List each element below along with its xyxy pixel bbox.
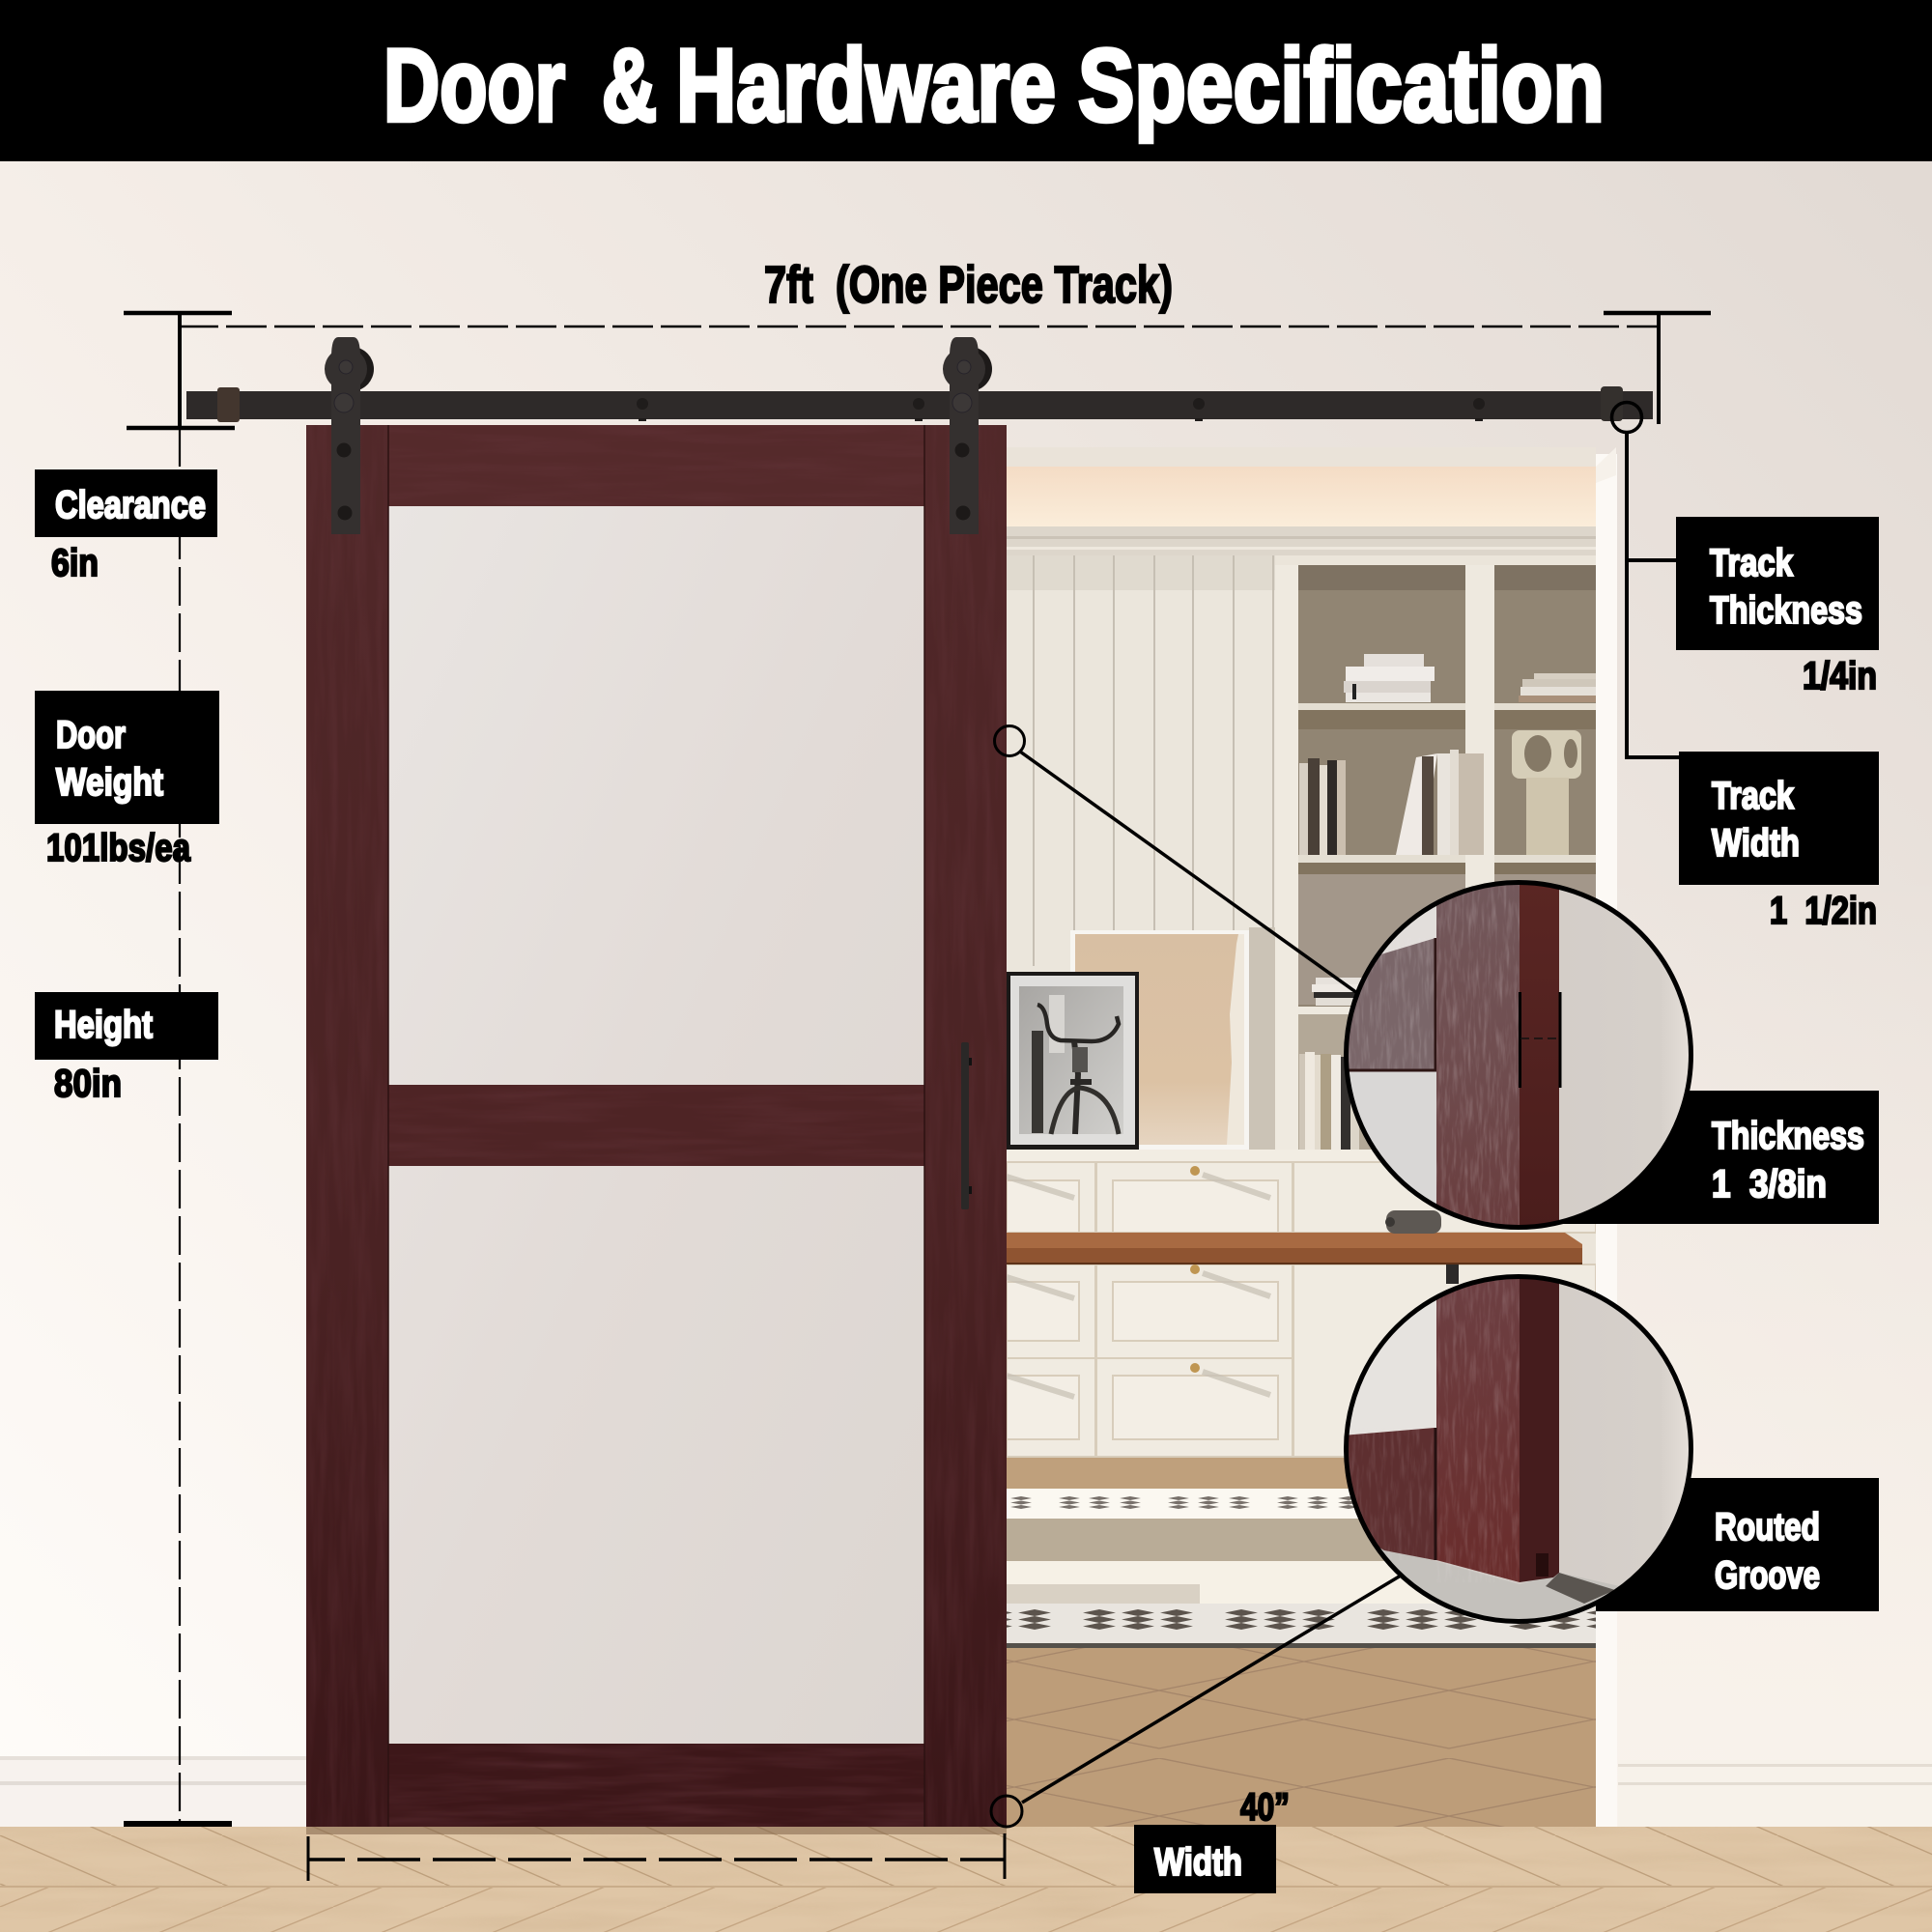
label: track width — [1679, 752, 1879, 932]
label: routed groove: Groove — [1715, 1554, 1820, 1597]
sculpture — [1512, 730, 1581, 855]
right stile — [924, 425, 1007, 1827]
header band — [0, 0, 1932, 161]
title: Door — [384, 27, 565, 143]
title — [384, 27, 1605, 143]
glass panel — [388, 506, 925, 1744]
floor — [0, 1827, 1932, 1932]
magnifier: routed groove detail — [1343, 1273, 1695, 1628]
bottom rail — [388, 1744, 924, 1827]
label: clearance: 6in — [51, 542, 99, 584]
label: track width: Track — [1712, 775, 1795, 817]
books stack right — [1519, 673, 1596, 702]
label: track width: Width — [1712, 822, 1800, 865]
track bolts — [637, 398, 1485, 421]
baseboards — [0, 1756, 1932, 1827]
door handle — [961, 1042, 972, 1209]
label: thickness: 1 3/8in — [1712, 1163, 1827, 1206]
gold knobs — [1190, 1166, 1200, 1373]
label: clearance: Clearance — [55, 484, 206, 526]
middle rail — [388, 1085, 924, 1166]
books stack — [1344, 654, 1435, 702]
groove leader line and marker — [991, 1573, 1406, 1827]
top rail — [388, 425, 924, 506]
barn door — [306, 425, 1007, 1827]
label: routed groove — [1596, 1478, 1879, 1611]
label: door weight: 101lbs/ea — [46, 827, 191, 869]
wall panelling — [1007, 555, 1275, 1159]
track length dimension line — [124, 313, 1711, 428]
right hanger — [943, 337, 992, 534]
bowl — [1385, 1210, 1441, 1234]
title: & — [602, 27, 657, 143]
rug — [1007, 1489, 1596, 1648]
label: thickness: Thickness — [1712, 1115, 1864, 1157]
table — [1007, 1233, 1582, 1284]
magnifier: door thickness detail — [1343, 879, 1695, 1232]
label: track thickness: Thickness — [1710, 589, 1862, 632]
label: height — [35, 992, 218, 1105]
label: width — [1134, 1786, 1290, 1893]
framed bicycle photo — [1007, 972, 1139, 1150]
door frame trim — [1596, 447, 1617, 1827]
soffit — [1007, 447, 1596, 467]
label: height: Height — [54, 1004, 153, 1046]
track length label: 7ft (One Piece Track) — [764, 256, 1173, 314]
label: track thickness: Track — [1710, 542, 1794, 584]
label: width: Width — [1154, 1841, 1242, 1884]
cabinets — [1007, 1162, 1596, 1457]
knob shadows — [1007, 1175, 1270, 1397]
title: Hardware — [676, 27, 1056, 143]
label: width: 40” — [1240, 1786, 1290, 1829]
ceiling cove light — [1007, 467, 1596, 526]
label: door weight: Weight — [56, 761, 163, 804]
inner floor — [1007, 1458, 1596, 1489]
label: track width: 1 1/2in — [1770, 890, 1877, 932]
door width dimension line — [308, 1833, 1005, 1881]
title: Specification — [1078, 27, 1605, 143]
parquet floor inside room — [1007, 1648, 1596, 1827]
bookshelves — [1275, 565, 1596, 1156]
label: track thickness: 1/4in — [1803, 655, 1877, 697]
left stile — [306, 425, 388, 1827]
label: height: 80in — [54, 1063, 122, 1105]
room seen through doorway — [1007, 447, 1596, 1827]
left hanger — [325, 337, 374, 534]
track leader lines and marker — [1611, 402, 1679, 757]
label: thickness — [1560, 1091, 1879, 1224]
sliding track — [186, 386, 1653, 422]
label: routed groove: Routed — [1715, 1506, 1820, 1548]
label: door weight: Door — [56, 714, 126, 756]
track stops — [217, 386, 1623, 422]
lower books — [1299, 978, 1364, 1150]
label: track thickness — [1676, 517, 1879, 697]
upright books — [1299, 750, 1484, 855]
label: clearance — [35, 469, 217, 584]
thickness leader line and marker — [995, 726, 1357, 993]
label: door weight — [35, 691, 219, 869]
counter — [1007, 1150, 1596, 1161]
beige art print — [1070, 930, 1249, 1150]
door height dimension line — [124, 428, 232, 1824]
crown molding — [1007, 526, 1596, 555]
